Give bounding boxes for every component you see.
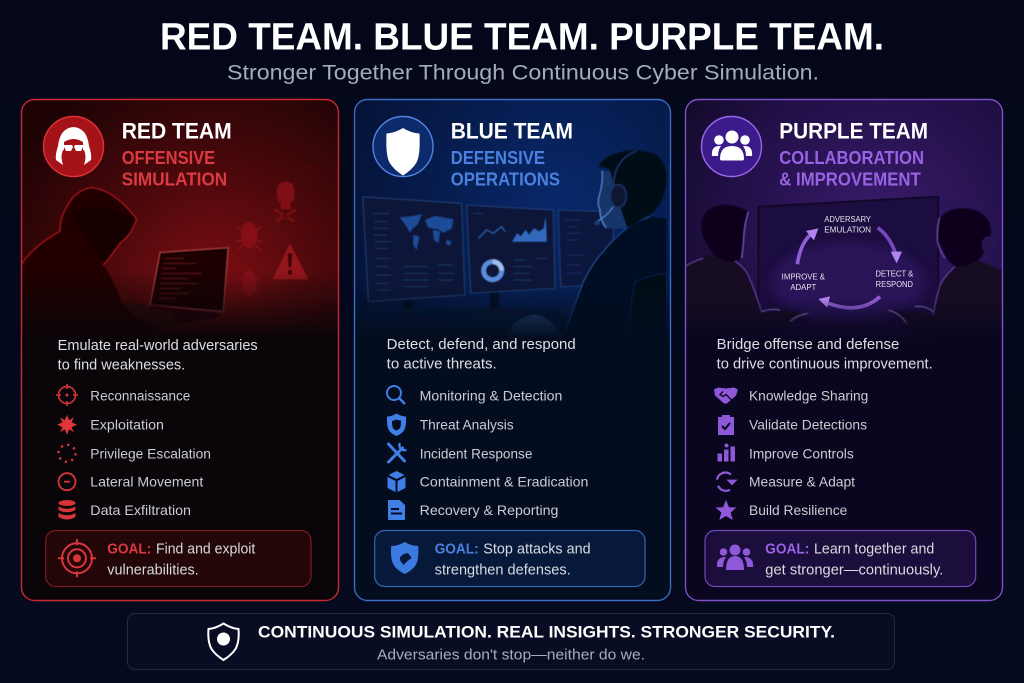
monitor 3 bbox=[558, 210, 613, 287]
icon: magnifier bbox=[387, 386, 405, 404]
callout: red goal bbox=[46, 530, 311, 586]
icon: crosshair bbox=[56, 384, 78, 406]
icon: goal shield bbox=[391, 542, 418, 574]
description bbox=[387, 337, 576, 372]
icon: refresh bbox=[717, 473, 735, 491]
subtitle: Stronger Together Through Continuous Cyber Simulation. bbox=[227, 61, 819, 84]
icon: star bbox=[716, 500, 736, 520]
description bbox=[58, 338, 258, 374]
illustration: hacker at laptop: 1 0 bbox=[307, 176, 317, 185]
callout: blue goal bbox=[375, 530, 645, 586]
description: Detect, defend, and respond bbox=[387, 337, 576, 353]
icon: bars bbox=[718, 444, 735, 462]
subheading: defensive operations bbox=[451, 148, 560, 190]
icon: lateral circle bbox=[58, 473, 76, 490]
description: Bridge offense and defense bbox=[717, 337, 899, 353]
callout: purple goal: get stronger—continuously. bbox=[765, 562, 943, 578]
callout: blue goal: Stop attacks and bbox=[483, 542, 591, 558]
cycle labels: RESPOND bbox=[876, 280, 913, 289]
description: to find weaknesses. bbox=[58, 358, 185, 374]
subheading: collaboration and improvement: & IMPROVEMENT bbox=[779, 170, 921, 190]
list: blue capabilities: Incident Response bbox=[420, 445, 533, 461]
cycle arrows bbox=[797, 228, 896, 308]
illustration: hacker at laptop: 1 0 1 1 bbox=[237, 198, 259, 207]
list: red capabilities: Data Exfiltration bbox=[90, 502, 191, 518]
list: purple capabilities: Build Resilience bbox=[749, 502, 848, 518]
list: blue capabilities: Threat Analysis bbox=[420, 416, 514, 432]
icon: clipboard bbox=[718, 415, 734, 435]
icon: hooded hacker bbox=[44, 116, 104, 176]
heading: red team: RED TEAM bbox=[122, 118, 232, 143]
subheading: offensive simulation: SIMULATION bbox=[122, 170, 227, 190]
laptop bbox=[150, 248, 228, 312]
list: blue capabilities: Recovery & Reporting bbox=[420, 502, 558, 518]
subheading: defensive operations: DEFENSIVE bbox=[451, 148, 545, 168]
list: blue capabilities: Monitoring & Detection bbox=[420, 387, 562, 403]
cycle labels: ADAPT bbox=[790, 283, 816, 292]
subheading: collaboration and improvement bbox=[779, 148, 924, 190]
monitor 2 bbox=[467, 205, 555, 293]
cycle labels: DETECT & bbox=[875, 270, 914, 279]
illustration: hacker at laptop: 0 1 bbox=[267, 141, 277, 150]
right person bbox=[888, 208, 1005, 337]
cycle labels bbox=[782, 215, 914, 292]
icon: team bbox=[702, 116, 762, 176]
list: purple capabilities: Improve Controls bbox=[749, 445, 854, 461]
list: red capabilities bbox=[56, 384, 211, 520]
illustration: hacker at laptop: 0 0 1 0 bbox=[297, 225, 319, 234]
cycle labels: EMULATION bbox=[824, 225, 871, 234]
title: RED TEAM. BLUE TEAM. PURPLE TEAM. bbox=[160, 16, 884, 58]
panel: red team bbox=[20, 99, 339, 601]
list: purple capabilities: Measure & Adapt bbox=[749, 474, 855, 490]
subheading: offensive simulation: OFFENSIVE bbox=[122, 148, 215, 168]
analyst silhouette bbox=[510, 314, 558, 332]
list: red capabilities: Exploitation bbox=[90, 416, 164, 432]
list: purple capabilities bbox=[714, 387, 868, 520]
icon: handshake bbox=[714, 388, 738, 404]
icon: footer shield bbox=[208, 624, 239, 660]
monitor 1 bbox=[363, 197, 465, 302]
icon: database bbox=[58, 500, 76, 520]
callout: red goal: GOAL: bbox=[107, 542, 151, 558]
footer headline: CONTINUOUS SIMULATION. REAL INSIGHTS. STRONGER SECURITY. bbox=[258, 624, 835, 642]
callout: blue goal: strengthen defenses. bbox=[435, 562, 571, 578]
illustration: analyst at monitors bbox=[350, 150, 667, 337]
list: red capabilities: Privilege Escalation bbox=[90, 445, 211, 461]
subheading: collaboration and improvement: COLLABORATION bbox=[779, 148, 924, 168]
description: Emulate real-world adversaries bbox=[58, 338, 258, 354]
illustration: hacker at laptop: 0 1 bbox=[303, 205, 313, 214]
list: purple capabilities: Knowledge Sharing bbox=[749, 387, 868, 403]
monitor stands bbox=[382, 292, 530, 326]
illustration: hacker at laptop bbox=[20, 141, 319, 338]
illustration: collaboration screen bbox=[685, 197, 1005, 337]
list: red capabilities: Reconnaissance bbox=[90, 387, 191, 403]
icon: burst bbox=[57, 415, 77, 435]
callout: blue goal: GOAL: bbox=[435, 542, 479, 558]
footer banner bbox=[128, 614, 894, 670]
illustration: hacker at laptop: 0 0 1 0 bbox=[297, 163, 319, 172]
cycle labels: IMPROVE & bbox=[782, 272, 826, 281]
icon: wrench and screwdriver bbox=[388, 444, 406, 462]
icon: goal team bbox=[717, 544, 753, 570]
icon: small shield bbox=[387, 414, 406, 436]
list: blue capabilities bbox=[387, 386, 588, 520]
description: to active threats. bbox=[387, 356, 497, 372]
callout: red goal: vulnerabilities. bbox=[107, 562, 199, 578]
icon: cube bbox=[388, 471, 406, 492]
callout: red goal: Find and exploit bbox=[156, 542, 255, 558]
callout: purple goal: Learn together and bbox=[814, 542, 934, 558]
desk bbox=[404, 308, 561, 317]
description: to drive continuous improvement. bbox=[717, 356, 933, 372]
left person bbox=[685, 205, 808, 337]
description bbox=[717, 337, 933, 372]
heading: purple team: PURPLE TEAM bbox=[779, 118, 928, 143]
subheading: offensive simulation bbox=[122, 148, 227, 190]
hacker silhouette bbox=[22, 188, 160, 328]
panel: blue team bbox=[350, 99, 671, 601]
callout: purple goal bbox=[705, 530, 976, 586]
icon: dotted circle bbox=[58, 445, 76, 462]
cycle labels: ADVERSARY bbox=[824, 215, 872, 224]
icon: document bbox=[388, 500, 405, 520]
subheading: defensive operations: OPERATIONS bbox=[451, 170, 560, 190]
illustration: hacker at laptop: 1 bbox=[313, 238, 317, 247]
list: blue capabilities: Containment & Eradication bbox=[420, 474, 588, 490]
icon: target bbox=[58, 539, 96, 577]
list: red capabilities: Lateral Movement bbox=[90, 474, 203, 490]
callout: purple goal: GOAL: bbox=[765, 542, 809, 558]
panel: purple team bbox=[685, 99, 1005, 601]
icon: shield bbox=[373, 116, 433, 176]
footer tagline: Adversaries don't stop—neither do we. bbox=[377, 647, 645, 663]
list: purple capabilities: Validate Detections bbox=[749, 416, 867, 432]
heading: blue team: BLUE TEAM bbox=[451, 118, 573, 143]
headset bbox=[610, 151, 637, 207]
